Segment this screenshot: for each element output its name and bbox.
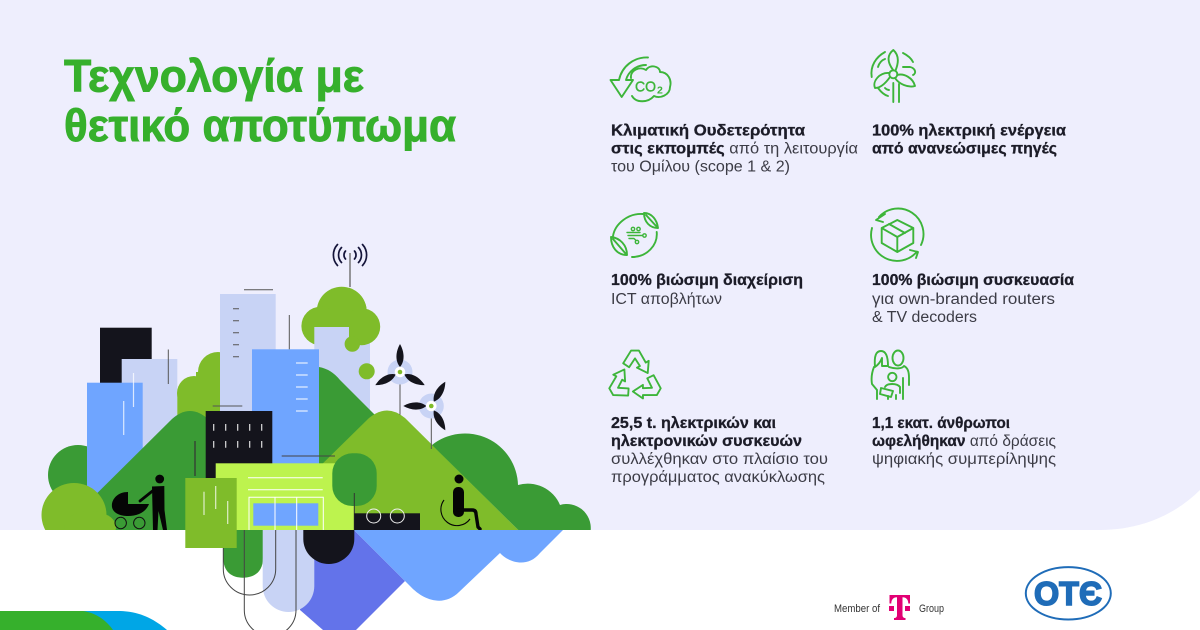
black bench [354,509,420,530]
text: 25,5 t. ηλεκτρικών και [611,415,776,432]
logo: Member of T Group: Group [919,603,944,615]
text: του Ομίλου (scope 1 & 2) [611,158,790,176]
corner shape: blue and green [0,611,167,630]
text: 100% ηλεκτρική ενέργεια [872,123,1066,140]
icon: family [872,350,909,399]
icon: CO2 cloud: CO [635,78,656,96]
icon: wind turbine outline [871,50,915,102]
text: 100% βιώσιμη συσκευασία [872,272,1074,289]
icon: person with stroller [112,475,167,530]
back bush [177,352,220,418]
city illustration [42,244,591,630]
light bush [42,483,106,530]
left dark hill [98,411,206,530]
text: renewable sources: από ανανεώσιμες πηγές [872,140,1057,157]
text: ηλεκτρονικών συσκευών [611,433,802,450]
item: recycling [604,351,828,486]
text: 1,1 εκατ. άνθρωποι [872,415,1010,432]
text: προγράμματος ανακύκλωσης [611,469,825,486]
cloud tree and building [301,287,380,422]
blue tower [252,315,319,469]
icon: CO2 cloud: 2 [657,84,663,96]
item: renewable energy [871,50,1066,140]
text: packaging detail [872,291,1055,326]
left buildings [48,328,177,508]
text [611,415,828,486]
icon: leaves and circuit [611,213,658,257]
logo: Member of T Group: Member of [834,603,881,615]
item: digital inclusion [872,350,1010,432]
icon: CO2 cloud [610,57,671,101]
title: θετικό αποτύπωμα [64,100,456,151]
underground shapes [223,530,563,630]
right dark hill [319,367,374,464]
text: inclusion detail: ψηφιακής συμπερίληψης [872,451,1056,468]
item: sustainable packaging [871,209,1074,289]
text: 100% βιώσιμη διαχείριση [611,272,803,289]
icon: wind turbine 1 [374,344,426,415]
black building [206,406,272,481]
icon: person in wheelchair [441,474,480,529]
icon: antenna [333,244,367,287]
title: Τεχνολογία με [64,50,364,102]
right dark bushes [432,433,591,530]
text: Κλιματική Ουδετερότητα [611,123,805,140]
text: inclusion detail [872,433,1056,468]
round tree [332,453,377,530]
logo: OTE [1026,567,1111,620]
icon: recycling arrows [604,351,665,404]
light green hill [323,410,518,530]
text: στις εκπομπές από τη λειτουργία [611,140,858,157]
item: climate neutrality [610,57,858,176]
green square building [185,478,237,548]
lime building [216,463,354,530]
text [611,123,858,176]
text: inclusion detail: ωφελήθηκαν από δράσεις [872,433,1056,450]
item: ICT waste [611,213,803,289]
icon: wind turbine 2 [403,380,448,449]
text: συλλέχθηκαν στο πλαίσιο του [611,451,828,468]
logo: Member of T Group [834,595,944,620]
buildings, hills and trees above ground [42,287,591,547]
title [64,50,456,151]
icon: box with arrows [871,209,923,261]
text: packaging detail: για own-branded routers [872,291,1055,308]
logo: OTE: OTЄ [1034,575,1102,612]
tall pale tower [220,290,276,419]
text: packaging detail: & TV decoders [872,309,977,326]
text: ICT waste detail: ICT αποβλήτων [611,291,722,308]
